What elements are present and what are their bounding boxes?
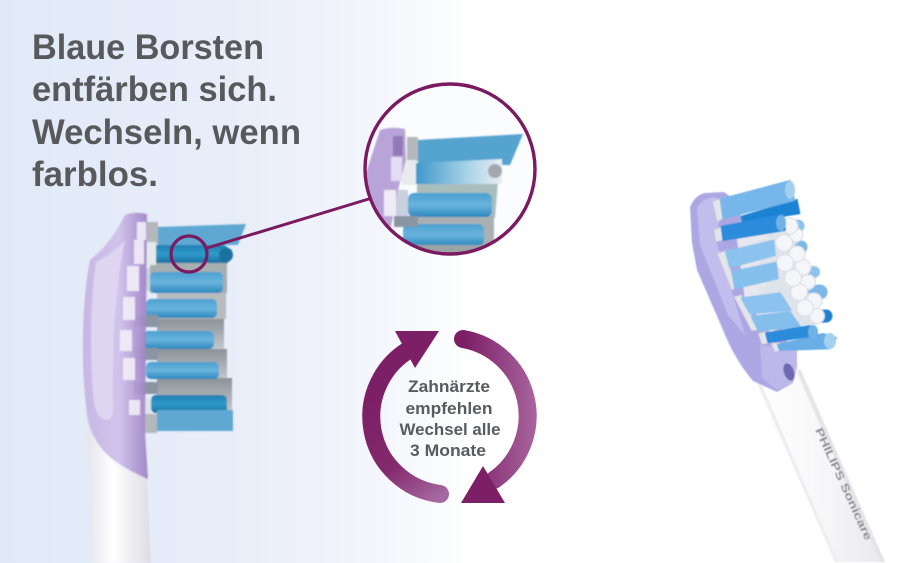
heading: Wechseln, wenn (32, 113, 301, 152)
head highlight (697, 197, 745, 335)
right brush handle (757, 368, 885, 562)
arrow: left arc (371, 331, 440, 494)
right toothbrush (690, 181, 885, 562)
handle left edge (757, 383, 838, 562)
heading: entfärben sich. (32, 70, 277, 109)
heading: Blaue Borsten (32, 28, 264, 67)
cycle label (400, 377, 500, 460)
magnified callout circle (362, 84, 535, 257)
tuft end caps (776, 181, 836, 349)
blue tufts at back (780, 226, 826, 317)
collars (713, 198, 781, 352)
left brush purple head (83, 213, 148, 479)
head highlight (91, 240, 125, 420)
handle shadow edge (797, 368, 885, 562)
arrow: right arc (461, 339, 528, 503)
cycle label: Zahnärzte (408, 377, 490, 396)
tuft bed (735, 218, 808, 332)
cycle label: 3 Monate (410, 441, 486, 460)
left brush collars (131, 222, 158, 433)
head lower lobe (760, 345, 797, 390)
right brush purple head (690, 192, 797, 392)
pointer line and small circle (171, 198, 372, 272)
cycle label: empfehlen (406, 399, 492, 418)
left brush handle (87, 415, 151, 563)
cycle arrows (371, 331, 528, 503)
background gradient (0, 0, 476, 563)
heading (32, 28, 301, 194)
heading: farblos. (32, 155, 158, 194)
left brush bristles (143, 224, 246, 431)
cycle label: Wechsel alle (400, 420, 500, 439)
head retainers (120, 222, 146, 415)
right brush brand text: PHILIPS Sonicare (812, 426, 874, 542)
left toothbrush (83, 213, 246, 563)
white tufts (760, 218, 824, 324)
blue tufts at front (721, 181, 836, 350)
mount hole (781, 362, 797, 382)
magnified bristles (362, 128, 523, 257)
